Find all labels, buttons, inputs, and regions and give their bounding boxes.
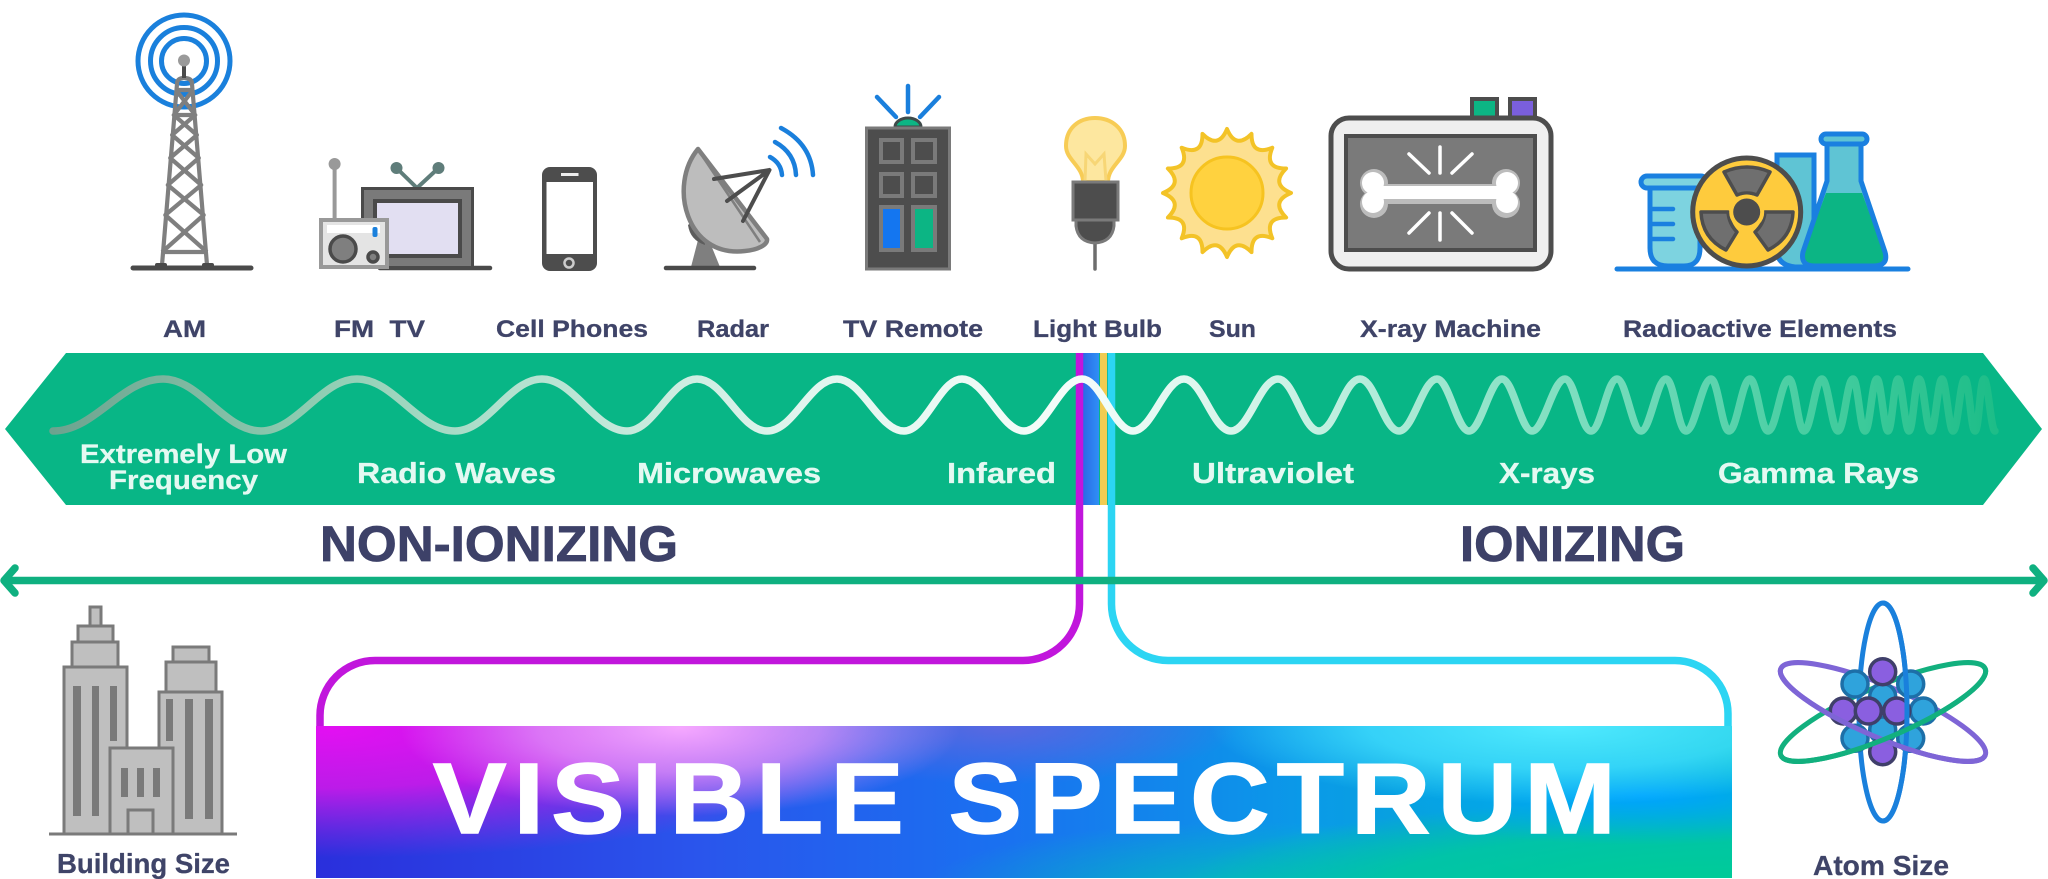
icon: AM radio tower <box>133 15 251 268</box>
spectrum band <box>5 353 2042 505</box>
device labels: Sun <box>1209 316 1256 343</box>
icon: TV remote <box>866 86 950 269</box>
panel: visible spectrum gradient <box>316 726 1732 878</box>
connector: cyan line to visible spectrum <box>1112 353 1728 728</box>
icon: sun <box>1163 129 1291 257</box>
band labels: Radio Waves <box>357 458 556 490</box>
band labels: Extremely Low <box>80 439 288 469</box>
band labels <box>80 439 1919 495</box>
device labels: X-ray Machine <box>1360 316 1541 343</box>
device labels: Cell Phones <box>496 316 648 343</box>
band labels: Microwaves <box>637 458 821 490</box>
heading: non-ionizing: NON-IONIZING <box>320 516 678 572</box>
label: building size: Building Size <box>57 848 230 879</box>
icon: cell phone <box>542 167 597 271</box>
heading: ionizing: IONIZING <box>1460 516 1685 572</box>
device labels: AM <box>163 316 206 343</box>
icon: buildings <box>49 607 237 834</box>
title: visible spectrum: VISIBLE SPECTRUM <box>433 744 1623 855</box>
connector: violet line to visible spectrum <box>320 353 1079 728</box>
band labels: Frequency <box>109 465 258 495</box>
icon: atom <box>1771 603 1995 821</box>
device labels <box>163 316 1897 343</box>
band labels: Gamma Rays <box>1718 458 1919 490</box>
device labels: Light Bulb <box>1033 316 1162 343</box>
icon: FM radio and TV <box>321 158 490 268</box>
icon: radar dish <box>666 128 813 268</box>
device labels: FM TV <box>334 316 426 343</box>
band labels: Infared <box>947 458 1056 490</box>
wave <box>53 379 1995 431</box>
visible light stripes in band <box>1083 353 1107 505</box>
device labels: Radioactive Elements <box>1623 316 1897 343</box>
double-headed arrow <box>4 568 2044 593</box>
band labels: X-rays <box>1499 458 1595 490</box>
icon: x-ray machine <box>1331 99 1551 269</box>
device labels: Radar <box>697 316 769 343</box>
icon: radioactive elements <box>1617 134 1908 269</box>
band labels: Ultraviolet <box>1192 458 1354 490</box>
device labels: TV Remote <box>843 316 983 343</box>
icon: light bulb <box>1066 118 1125 269</box>
